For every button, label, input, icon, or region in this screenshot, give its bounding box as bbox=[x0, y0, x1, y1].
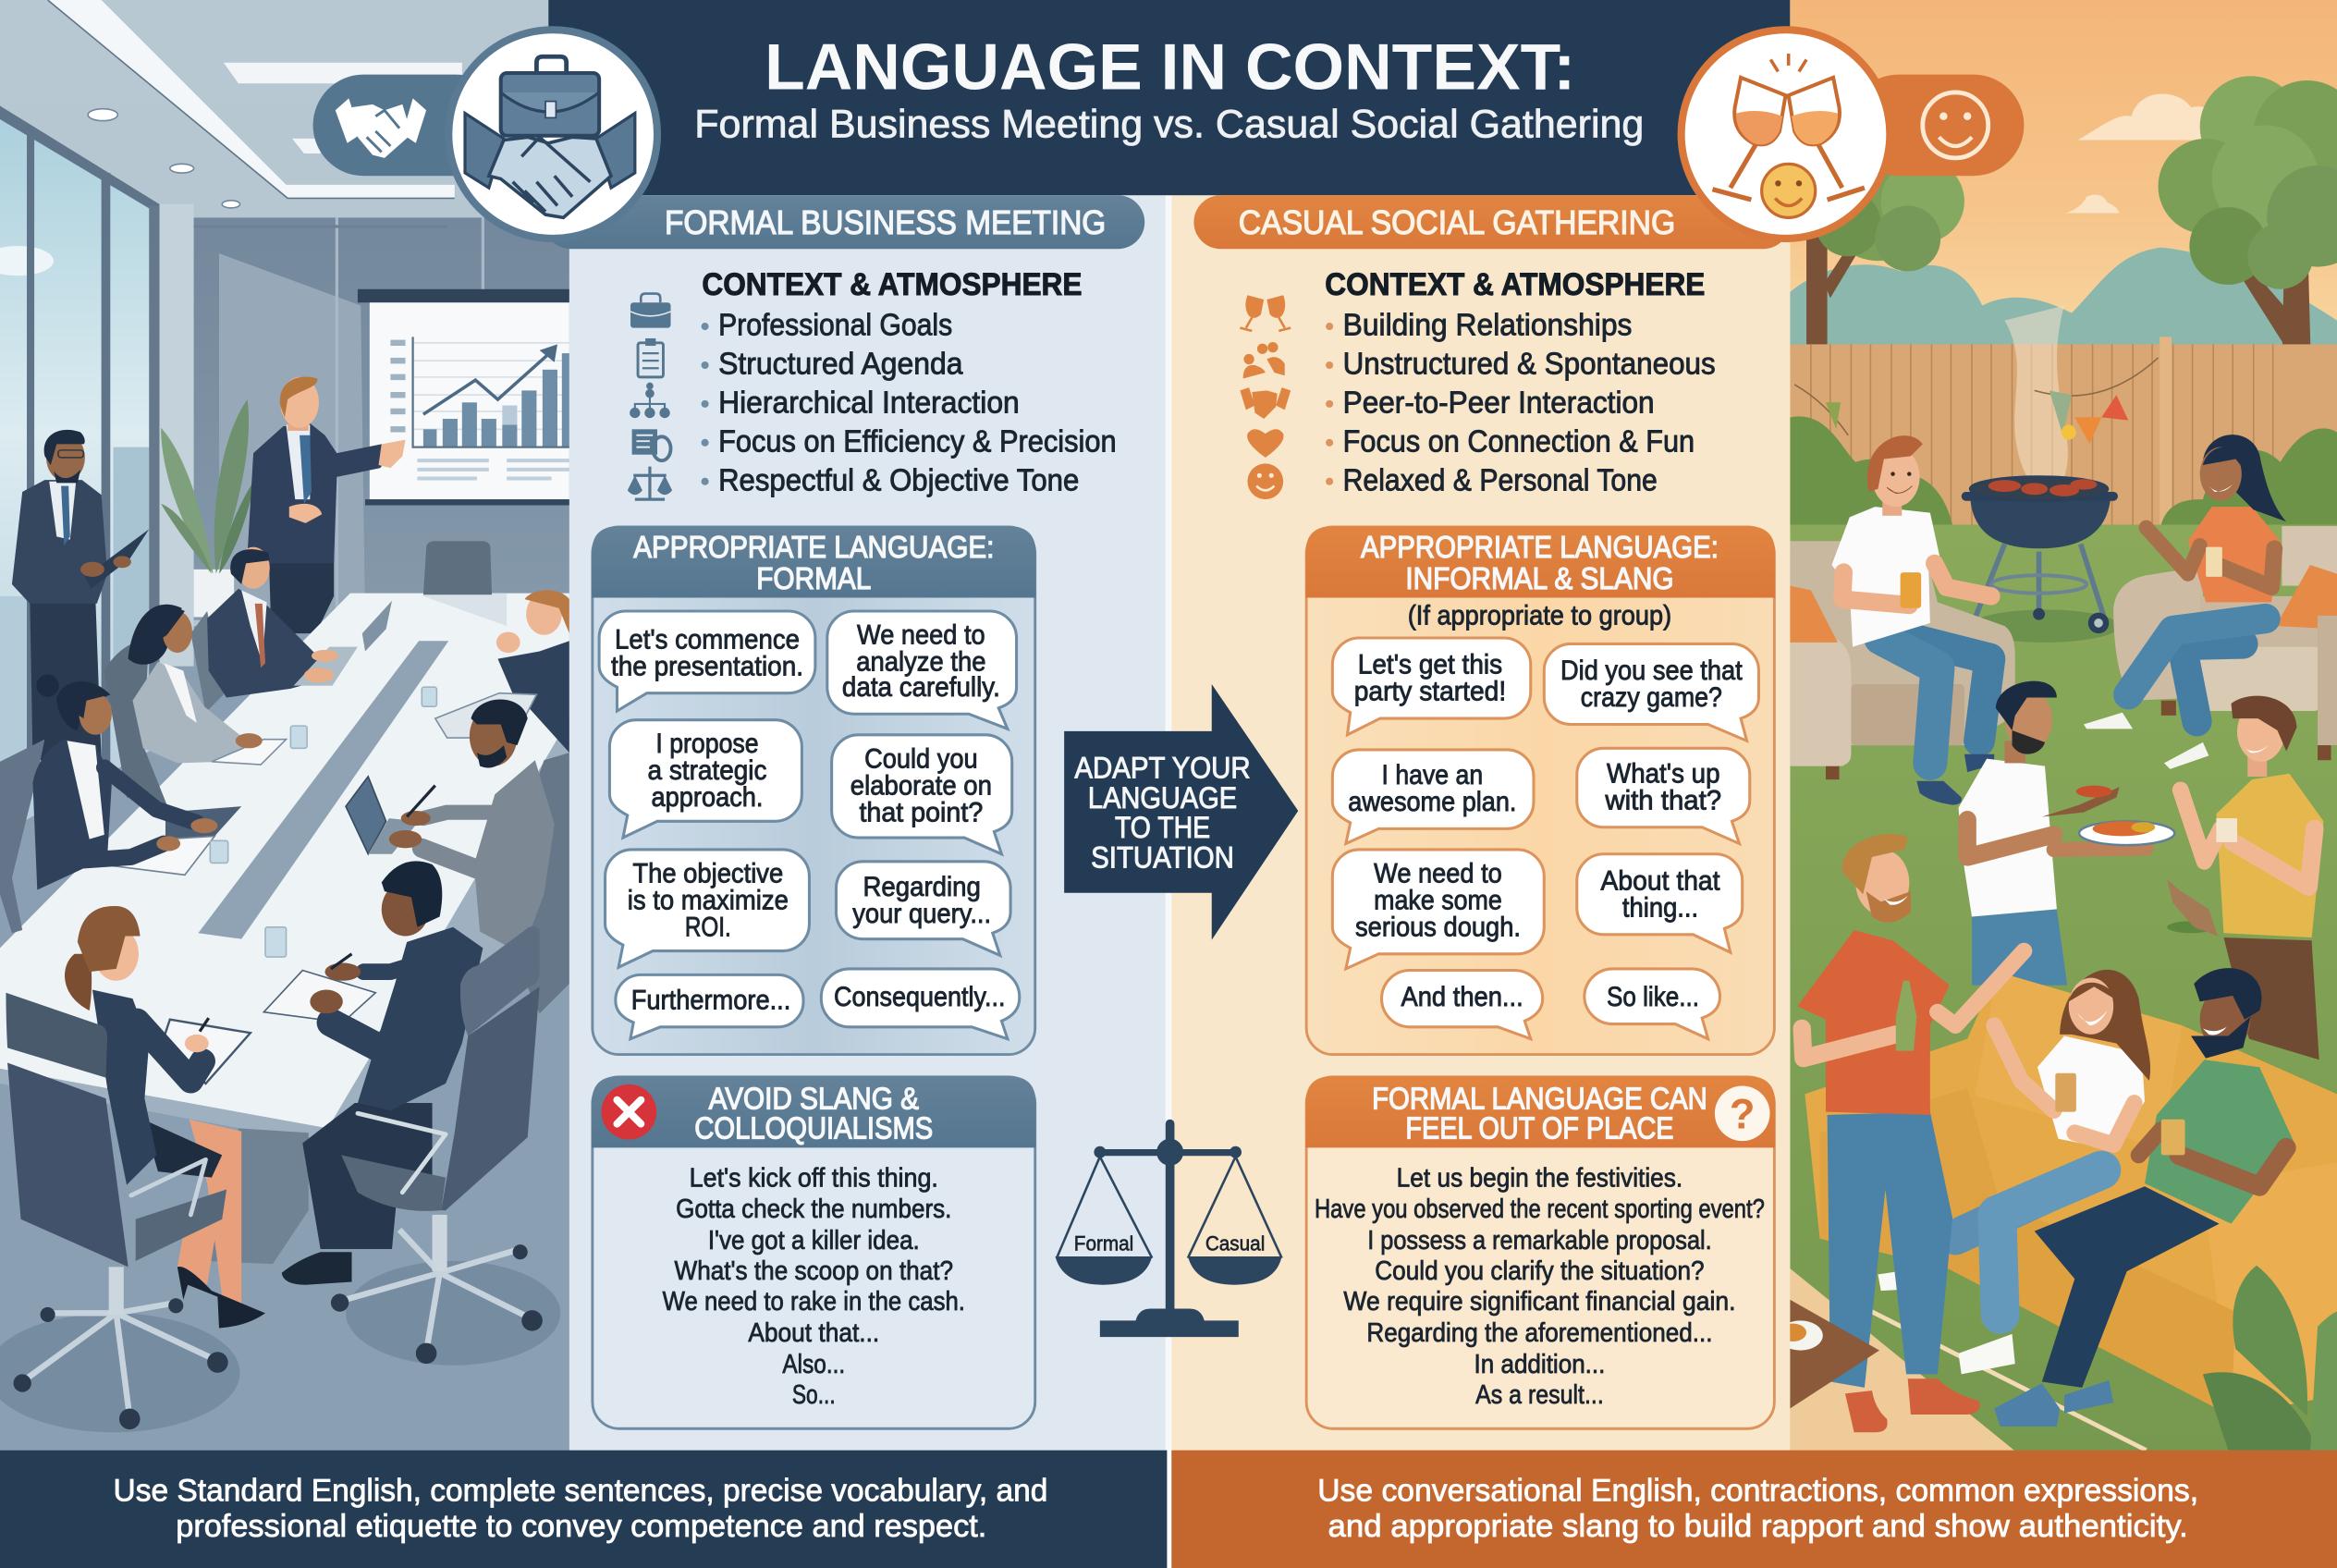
panel: appropriate language informal: APPROPRIATE LANGUAGE: bbox=[1361, 531, 1719, 565]
arrow: adapt your language: TO THE bbox=[1115, 811, 1210, 844]
panel: formal language out of place bbox=[1305, 1076, 1775, 1428]
footer: formal summary: professional etiquette to convey competence and respect. bbox=[176, 1509, 986, 1544]
presentation screen with chart bbox=[358, 289, 569, 506]
badge: smiley pill bbox=[1848, 75, 2024, 176]
panel: formal background bbox=[569, 195, 1166, 1451]
speech bubbles: formal phrases: I propose bbox=[655, 729, 759, 759]
panel: casual background bbox=[1171, 195, 1790, 1451]
badge: handshake pill bbox=[313, 75, 507, 176]
man in green shirt bbox=[1994, 968, 2294, 1427]
speech bubbles: informal phrases: with that? bbox=[1604, 785, 1721, 815]
panel: formal language out of place: I possess a remarkable proposal. bbox=[1367, 1226, 1712, 1256]
panel: formal language out of place: We require significant financial gain. bbox=[1343, 1287, 1735, 1317]
panel: avoid slang: COLLOQUIALISMS bbox=[694, 1112, 933, 1146]
panel: appropriate language informal: (If appropriate to group) bbox=[1408, 600, 1671, 631]
panel: formal language out of place: Regarding the aforementioned... bbox=[1366, 1318, 1712, 1348]
panel: avoid slang: What's the scoop on that? bbox=[675, 1256, 953, 1286]
section bar: casual bbox=[1193, 195, 1790, 249]
section bar: formal: FORMAL BUSINESS MEETING bbox=[665, 203, 1106, 241]
panel: formal language out of place: Have you observed the recent sporting event? bbox=[1315, 1194, 1765, 1224]
small bird bbox=[2167, 879, 2218, 936]
footer: casual summary bbox=[1171, 1451, 2337, 1568]
panel: avoid slang: So... bbox=[792, 1380, 836, 1410]
man with plate in white shirt bbox=[1958, 681, 2174, 986]
man in grey suit with laptop bbox=[346, 699, 569, 1013]
lawn bbox=[1790, 524, 2337, 1461]
grill bbox=[1962, 477, 2120, 643]
arrow: adapt your language: ADAPT YOUR bbox=[1074, 752, 1251, 785]
speech bubbles: informal phrases: Did you see that bbox=[1560, 655, 1743, 686]
divider bbox=[1166, 195, 1171, 1451]
water glasses and documents bbox=[210, 687, 436, 957]
speech bubbles: formal phrases: is to maximize bbox=[628, 885, 789, 915]
panel: avoid slang bbox=[592, 1076, 1036, 1428]
panel: appropriate language informal: INFORMAL & SLANG bbox=[1405, 562, 1674, 596]
badge: briefcase and handshake circle bbox=[448, 30, 657, 239]
right sofa and woman in orange shirt bbox=[2084, 435, 2337, 769]
panel: avoid slang: Also... bbox=[782, 1350, 845, 1379]
speech bubbles: formal phrases: the presentation. bbox=[611, 651, 803, 681]
speech bubbles: informal phrases: What's up bbox=[1607, 758, 1720, 789]
speech bubbles: formal phrases: a strategic bbox=[648, 755, 767, 786]
speech bubbles: informal phrases: crazy game? bbox=[1581, 682, 1722, 713]
panel: formal language out of place: Could you clarify the situation? bbox=[1375, 1256, 1705, 1286]
speech bubbles: formal phrases: Consequently... bbox=[834, 982, 1005, 1012]
panel: avoid slang: About that... bbox=[748, 1318, 879, 1348]
speech bubbles: informal phrases: thing... bbox=[1622, 892, 1698, 923]
front left woman in chair bbox=[0, 906, 265, 1432]
panel: avoid slang: Let's kick off this thing. bbox=[690, 1163, 938, 1193]
icons: formal context bbox=[628, 294, 672, 499]
speech bubbles: formal phrases: The objective bbox=[632, 858, 783, 888]
badge: toasting glasses circle bbox=[1682, 30, 1890, 239]
speech bubbles: informal phrases: I have an bbox=[1382, 760, 1483, 790]
speech bubbles: formal phrases: Let's commence bbox=[615, 624, 800, 655]
context list: casual: Unstructured & Spontaneous bbox=[1343, 348, 1716, 382]
front right man in chair bbox=[263, 861, 560, 1366]
far right man with fist bbox=[435, 590, 569, 753]
speech bubbles: formal phrases: We need to bbox=[857, 619, 985, 650]
woman in dark jacket with bun bbox=[0, 675, 241, 933]
speech bubbles: formal phrases: analyze the bbox=[856, 646, 986, 677]
plant bbox=[161, 399, 256, 617]
fence bbox=[1790, 305, 2337, 531]
panel: avoid slang: We need to rake in the cash. bbox=[663, 1287, 965, 1317]
speech bubbles: informal phrases: make some bbox=[1374, 885, 1502, 915]
icons: casual context bbox=[1240, 295, 1291, 499]
yellow sofa bbox=[1805, 972, 2337, 1434]
icon: balance scale: Casual bbox=[1205, 1232, 1265, 1256]
context list: formal: Professional Goals bbox=[718, 309, 952, 343]
footer: formal summary: Use Standard English, complete sentences, precise vocabulary, and bbox=[114, 1473, 1047, 1508]
context list: casual: Peer-to-Peer Interaction bbox=[1343, 386, 1655, 421]
section bar: casual: CASUAL SOCIAL GATHERING bbox=[1239, 203, 1675, 241]
context list: formal: Respectful & Objective Tone bbox=[718, 463, 1079, 497]
panel: avoid slang: AVOID SLANG & bbox=[709, 1082, 919, 1116]
left armchair and man in white shirt bbox=[1790, 435, 2015, 805]
icon: question mark bbox=[1715, 1085, 1770, 1141]
subtitle: Formal Business Meeting vs. Casual Social Gathering bbox=[694, 102, 1644, 146]
speech bubbles: informal phrases: serious dough. bbox=[1355, 912, 1521, 942]
speech bubbles: informal phrases: And then... bbox=[1401, 982, 1523, 1012]
speech bubbles: formal phrases: your query... bbox=[852, 899, 991, 929]
conference table bbox=[0, 594, 569, 1264]
speech bubbles: formal phrases: Regarding bbox=[863, 872, 981, 902]
bushes bbox=[1790, 416, 2337, 524]
icon: question mark: ? bbox=[1730, 1090, 1756, 1137]
standing man with clipboard bbox=[12, 430, 149, 760]
speech bubbles: informal phrases: Let's get this bbox=[1358, 650, 1502, 680]
man in red shirt with bottle bbox=[1797, 834, 2024, 1432]
woman in grey jacket bbox=[104, 605, 287, 805]
speech bubbles: formal phrases: Could you bbox=[864, 743, 978, 774]
back seated man with tie and laptop bbox=[190, 547, 392, 713]
speech bubbles: informal phrases: So like... bbox=[1607, 982, 1699, 1012]
panel: avoid slang: I've got a killer idea. bbox=[708, 1226, 920, 1256]
footer: casual summary: and appropriate slang to build rapport and show authenticity. bbox=[1328, 1509, 2188, 1544]
man in yellow shirt bbox=[2181, 696, 2323, 1060]
speech bubbles: informal phrases bbox=[1332, 638, 1758, 1039]
header band bbox=[548, 0, 1790, 195]
section bar: formal bbox=[544, 195, 1144, 249]
side table and plant bbox=[1778, 1266, 2337, 1451]
panel: formal language out of place: Let us begin the festivities. bbox=[1397, 1163, 1682, 1193]
arrow: adapt your language bbox=[1064, 684, 1298, 940]
speech bubbles: formal phrases: that point? bbox=[859, 797, 983, 827]
panel: formal language out of place: In addition... bbox=[1474, 1350, 1605, 1379]
icon: red cross bbox=[602, 1084, 656, 1140]
illustration: formal business meeting room bbox=[0, 0, 569, 1451]
presenter bbox=[248, 377, 406, 633]
speech bubbles: informal phrases: party started! bbox=[1354, 677, 1506, 707]
context list: casual: CONTEXT & ATMOSPHERE bbox=[1325, 267, 1705, 302]
speech bubbles: formal phrases bbox=[599, 611, 1020, 1039]
speech bubbles: formal phrases: data carefully. bbox=[842, 672, 1000, 703]
panel: appropriate language formal bbox=[592, 526, 1036, 1055]
woman on sofa bbox=[1878, 970, 2150, 1374]
arrow: adapt your language: LANGUAGE bbox=[1088, 781, 1237, 815]
panel: appropriate language formal: FORMAL bbox=[756, 562, 871, 596]
trees bbox=[1806, 76, 2337, 447]
speech bubbles: formal phrases: elaborate on bbox=[850, 770, 992, 801]
footer: formal summary bbox=[0, 1451, 1167, 1568]
arrow: adapt your language: SITUATION bbox=[1091, 840, 1234, 874]
title: LANGUAGE IN CONTEXT: bbox=[765, 31, 1575, 104]
speech bubbles: formal phrases: approach. bbox=[652, 782, 763, 813]
panel: formal language out of place: As a result... bbox=[1475, 1380, 1604, 1410]
speech bubbles: informal phrases: awesome plan. bbox=[1348, 787, 1516, 817]
panel: formal language out of place: FEEL OUT OF PLACE bbox=[1405, 1112, 1674, 1146]
context list: formal: Focus on Efficiency & Precision bbox=[718, 424, 1117, 459]
context list: formal: CONTEXT & ATMOSPHERE bbox=[702, 267, 1082, 302]
context list: formal bbox=[702, 267, 1117, 497]
illustration: casual backyard gathering bbox=[1778, 0, 2337, 1461]
panel: formal language out of place: FORMAL LANGUAGE CAN bbox=[1372, 1082, 1707, 1116]
footer: casual summary: Use conversational English, contractions, common expressions, bbox=[1317, 1473, 2198, 1508]
panel: avoid slang: Gotta check the numbers. bbox=[676, 1194, 951, 1224]
context list: casual: Focus on Connection & Fun bbox=[1343, 424, 1695, 459]
context list: casual: Relaxed & Personal Tone bbox=[1343, 463, 1658, 497]
context list: formal: Hierarchical Interaction bbox=[718, 386, 1020, 421]
icon: balance scale bbox=[1055, 1120, 1282, 1337]
icon: balance scale: Formal bbox=[1074, 1232, 1133, 1256]
speech bubbles: formal phrases: ROI. bbox=[685, 912, 731, 942]
panel: appropriate language formal: APPROPRIATE LANGUAGE: bbox=[633, 531, 994, 565]
speech bubbles: informal phrases: About that bbox=[1601, 865, 1720, 896]
speech bubbles: formal phrases: Furthermore... bbox=[631, 985, 790, 1015]
speech bubbles: informal phrases: We need to bbox=[1374, 858, 1502, 888]
context list: formal: Structured Agenda bbox=[718, 348, 963, 382]
far chair bbox=[423, 541, 492, 594]
context list: casual bbox=[1325, 267, 1716, 497]
panel: appropriate language informal bbox=[1305, 526, 1775, 1055]
context list: casual: Building Relationships bbox=[1343, 309, 1632, 343]
